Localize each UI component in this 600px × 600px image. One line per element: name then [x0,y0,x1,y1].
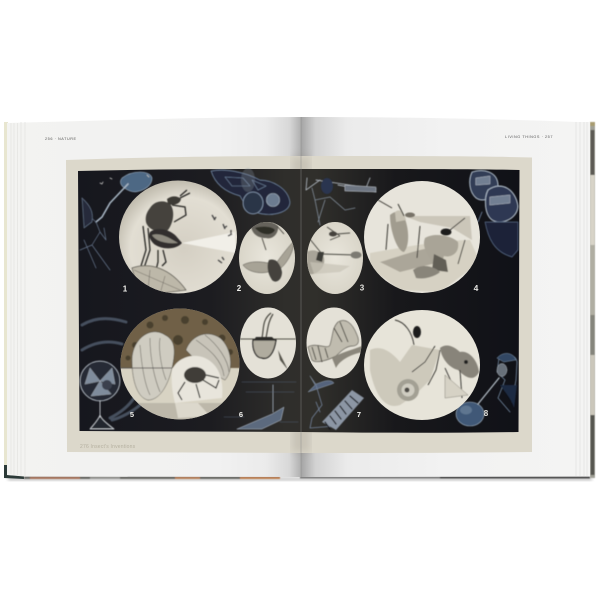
poster caption: 276 Insect's Inventions [80,444,136,450]
gutter fold [300,117,302,477]
insect circle 3 [307,222,363,294]
cover edge, bottom-left [4,464,24,479]
chalk: binocular man [306,178,376,225]
number 7: 7 [357,410,361,419]
blackboard [78,169,520,433]
book: cover and page edges [4,122,595,479]
chalk: submarine [224,382,298,429]
right page [301,117,590,477]
left cover edge [4,122,8,465]
number 6: 6 [239,410,243,419]
insect circle 7 [306,308,362,378]
header: left page: 256 · NATURE [45,137,77,141]
number 4: 4 [474,283,479,293]
spray cone [182,232,236,253]
number 2: 2 [237,284,242,293]
poster paper [66,156,532,453]
number 3: 3 [360,284,365,292]
number 8: 8 [484,409,489,418]
insect circle 8 [364,310,480,420]
chalk: fan and wind strokes [80,319,140,429]
book shadow [8,477,592,481]
chalk: accordion player [308,376,364,430]
bottom page-block edge with coloured fore-edge [24,476,590,479]
header: right page: LIVING THINGS · 257 [505,135,553,139]
chalk: bell player [456,353,517,426]
insect circle 1 [119,180,237,296]
chalk drawings [80,168,518,430]
number 5: 5 [130,410,134,419]
insect circle 2 [239,222,295,294]
poster paper gutter shading [292,156,310,453]
page stack lines [576,122,587,476]
chalk: knights [470,170,518,257]
insect circle 6 [240,308,296,378]
beetle body [146,201,173,232]
number 1: 1 [123,284,128,294]
chalk: soldier with smoke gun [80,172,152,270]
right cover edge [590,122,595,478]
left page [7,117,301,477]
page stack lines [11,122,25,476]
flies [212,215,232,263]
chalk: car [211,168,290,214]
leaf [132,266,186,296]
insect circle 4 [364,181,480,293]
insect circle 5: bees in hive [120,308,240,420]
